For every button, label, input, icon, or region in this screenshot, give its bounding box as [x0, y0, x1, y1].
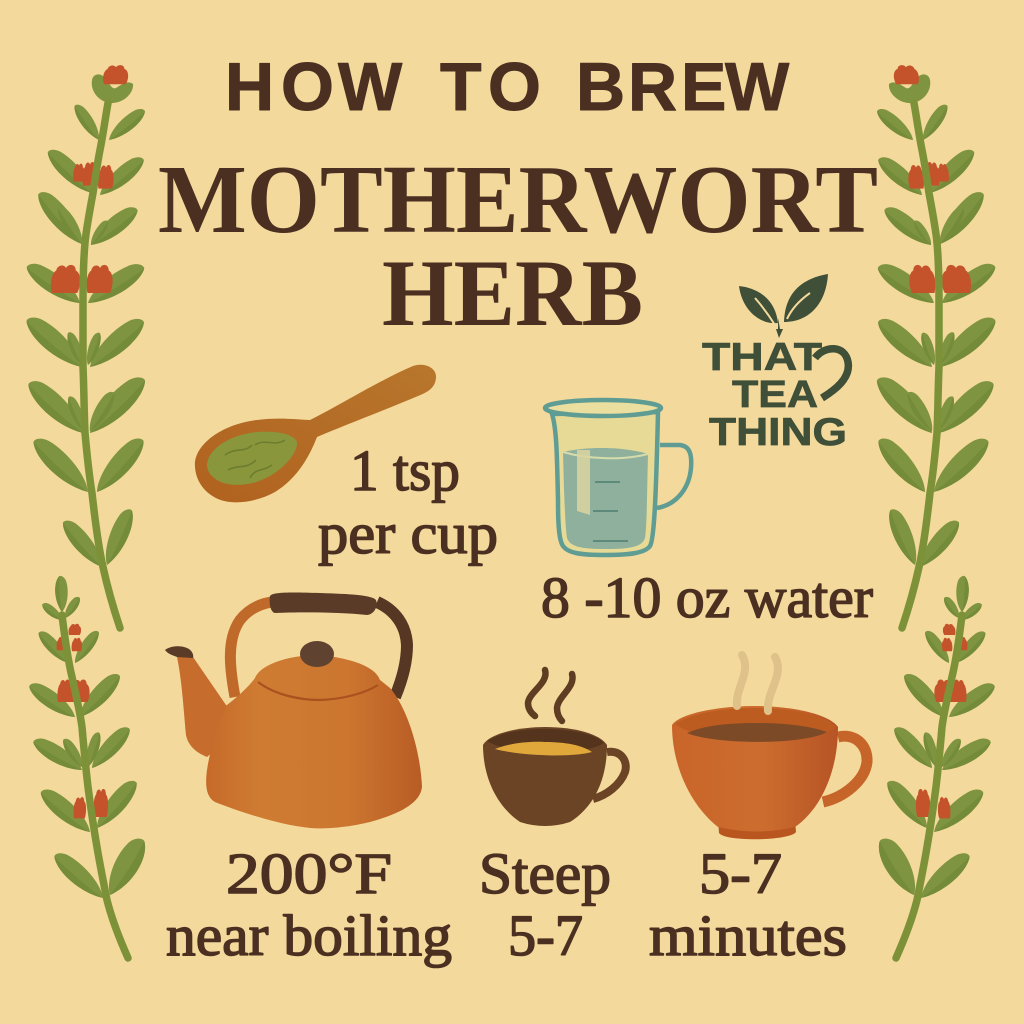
label: per cup: per cup — [318, 501, 498, 566]
label: temperature: 200°F — [226, 841, 392, 906]
title: herb: HERB — [382, 240, 643, 346]
label: water amount: 8 -10 oz water — [541, 565, 873, 630]
plant: small left sprig — [25, 575, 153, 958]
icon: large orange cup — [672, 655, 867, 839]
cup foot — [718, 820, 796, 839]
jug handle — [657, 445, 691, 508]
label: 1 tsp: 1 tsp — [350, 438, 460, 503]
icon: wooden spoon with herb — [195, 365, 436, 502]
label: steep: Steep — [479, 841, 611, 906]
icon: orange kettle — [165, 592, 422, 828]
logo: That Tea Thing — [702, 274, 848, 454]
spout — [177, 657, 250, 757]
icon: small brown cup — [483, 670, 626, 826]
label: 5-7: 5-7 — [699, 841, 782, 906]
steam — [528, 670, 573, 721]
kettle handle — [230, 602, 272, 697]
logo leaves — [739, 286, 778, 323]
jug rim — [545, 400, 661, 416]
plant: tall left sprig — [20, 65, 152, 628]
icon: measuring jug with water — [545, 400, 691, 555]
tea surface — [495, 742, 592, 755]
tea surface — [687, 723, 827, 742]
lid seam — [258, 682, 378, 700]
stem — [62, 615, 128, 958]
logo heart stroke — [815, 349, 848, 398]
logo words: THAT — [702, 336, 822, 379]
kettle body — [206, 655, 422, 828]
label: steep time: 5-7 — [508, 903, 583, 968]
cup handle — [823, 736, 867, 802]
water — [563, 448, 648, 549]
title: motherwort: MOTHERWORT — [158, 146, 878, 254]
title: how to brew: HOW TO BREW — [225, 49, 790, 125]
logo: That Tea Thing: TEA — [732, 374, 818, 416]
highlight strip — [577, 450, 590, 515]
stem — [83, 103, 120, 628]
herb in bowl — [207, 432, 297, 485]
cup handle — [593, 752, 626, 799]
logo: That Tea Thing: THING — [709, 411, 847, 454]
knob — [300, 641, 334, 667]
steam — [737, 655, 778, 711]
label: near boiling: near boiling — [166, 903, 452, 968]
calyx — [92, 74, 133, 103]
plant: tall right sprig — [870, 65, 1002, 628]
label: minutes: minutes — [649, 903, 847, 968]
plant: small right sprig — [871, 575, 999, 958]
